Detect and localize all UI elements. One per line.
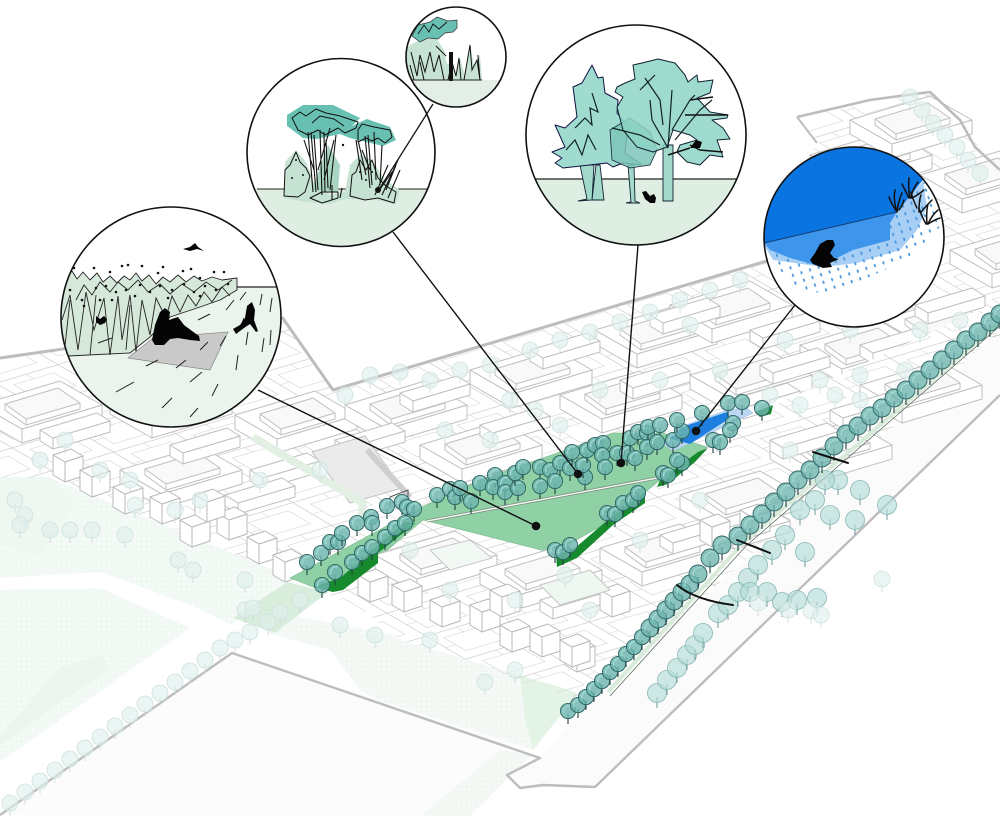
shrub outlines — [284, 152, 396, 203]
grass spikes — [410, 45, 480, 80]
mid water — [764, 212, 897, 267]
middle tree — [610, 118, 657, 168]
picnic blanket — [128, 332, 228, 370]
callout circle: pond and frog — [760, 140, 944, 327]
grass spikes — [304, 128, 400, 200]
grass mass — [406, 38, 482, 80]
reeds — [62, 280, 232, 355]
callout circle: meadow and picnic — [55, 207, 285, 430]
callout circle: understorey detail — [400, 7, 510, 110]
ground — [256, 189, 426, 246]
small circle leader — [380, 104, 433, 188]
building-grid street texture — [0, 92, 1000, 700]
park trees — [299, 394, 770, 598]
ground line — [412, 80, 482, 81]
black post — [449, 52, 453, 81]
left tree — [552, 65, 642, 168]
canopy — [412, 17, 457, 42]
avenue strip edge — [610, 326, 1000, 696]
central park lawn — [290, 433, 707, 590]
grey sports court — [312, 436, 402, 503]
ground — [413, 80, 500, 106]
ground — [69, 350, 272, 426]
outer pale avenue trees — [648, 470, 896, 708]
ground dashes — [98, 292, 272, 417]
trunks — [578, 145, 673, 203]
tree inner lines — [566, 75, 712, 155]
shrubs — [284, 150, 400, 204]
icon: squirrel — [642, 191, 656, 203]
foreground patch and blocks under park — [345, 300, 1000, 700]
park path — [427, 478, 657, 521]
callout circle: pine and shrub layer — [245, 58, 440, 250]
seed heads — [65, 264, 229, 307]
icon: flower — [96, 316, 107, 325]
meadow grass — [55, 270, 237, 356]
light water — [764, 182, 927, 267]
pale green path — [253, 437, 363, 525]
callout circle: woodland trees — [520, 25, 750, 250]
icon: bird in tree — [690, 140, 702, 148]
grey service road — [367, 450, 410, 497]
deep water — [764, 148, 923, 242]
goal frame — [390, 490, 408, 508]
right tree — [615, 59, 730, 165]
rain dot zone — [768, 182, 944, 294]
background building blocks — [0, 96, 1000, 582]
icon: reeds — [889, 178, 940, 224]
seed dots — [291, 144, 381, 193]
pond — [662, 408, 753, 451]
horizon — [237, 286, 276, 288]
icon: reading person — [152, 308, 200, 345]
surrounding green ground — [0, 330, 1000, 816]
entry strip — [233, 582, 328, 633]
leader lines and anchor dots — [258, 232, 795, 530]
canopy outlines — [292, 109, 392, 143]
avenue planting strip — [608, 322, 1000, 692]
street tree avenue — [560, 305, 1000, 724]
black section markers — [677, 452, 848, 605]
teal canopy — [287, 105, 396, 146]
dark green hedges — [313, 405, 773, 592]
icon: frog — [810, 240, 839, 268]
icon: bird — [183, 243, 204, 251]
park path core — [427, 478, 657, 521]
ground — [536, 180, 736, 244]
icon: running child — [233, 302, 258, 334]
